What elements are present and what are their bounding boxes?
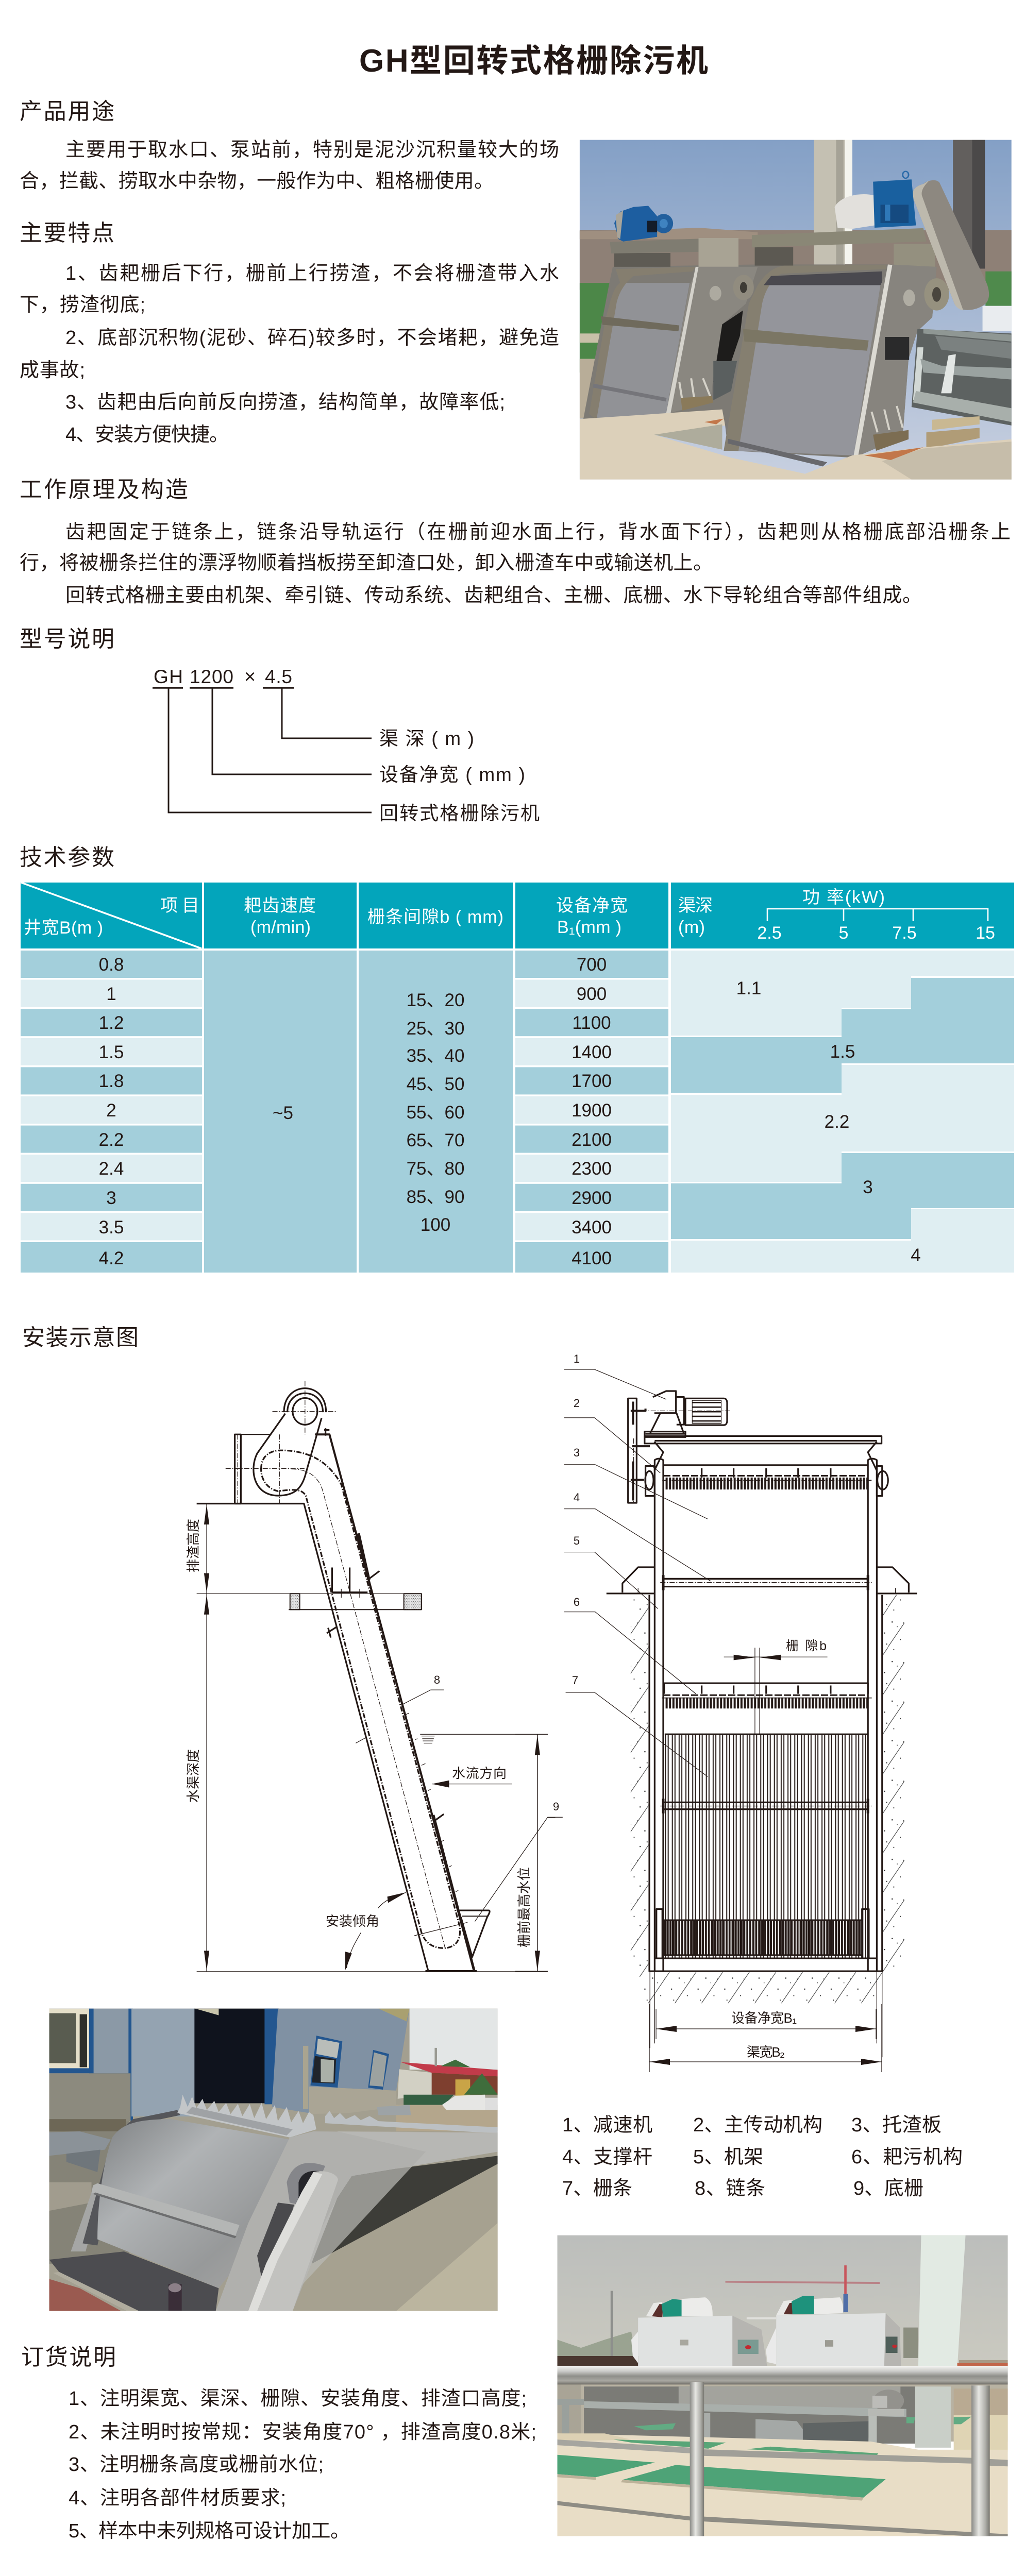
column: power by channel depth (stepped) [671, 951, 1014, 1273]
text block: ordering notes: 2、未注明时按常规：安装角度70° ，排渣高度0.8米; [69, 2421, 536, 2443]
text block: working principle: 齿耙固定于链条上，链条沿导轨运行（在栅前迎水面上行，背水面下行），齿耙则从格栅底部沿栅条上 [65, 521, 1011, 543]
column: power by channel depth (stepped): 4 [911, 1245, 921, 1265]
column: net width: 900 [577, 984, 607, 1004]
front-view installation drawing: 6 [574, 1596, 580, 1608]
photo: two installed screens behind stainless railing [557, 2235, 1008, 2538]
column: net width: 2100 [572, 1130, 612, 1150]
text block: ordering notes [69, 2388, 536, 2542]
heading: working principle: 工作原理及构造 [20, 477, 188, 502]
table header: 项 目 [160, 896, 199, 916]
side-view installation drawing: 排渣高度 [186, 1519, 201, 1572]
table header: 设备净宽 [556, 896, 628, 916]
text block: working principle: 回转式格栅主要由机架、牵引链、传动系统、齿耙组合、主栅、底栅、水下导轮组合等部件组成。 [65, 585, 922, 606]
text block: main features: 下，捞渣彻底; [20, 294, 145, 316]
text block: working principle [20, 521, 1011, 606]
text block: ordering notes: 5、样本中未列规格可设计加工。 [69, 2520, 350, 2542]
heading: product use: 产品用途 [20, 99, 114, 124]
parts legend: 5、机架 [693, 2146, 763, 2168]
column: well width: 4.2 [99, 1248, 124, 1268]
parts legend: 1、减速机 [562, 2114, 652, 2136]
column: bar gap [359, 951, 513, 1273]
column: well width: 3 [106, 1188, 116, 1208]
title: GH型回转式格栅除污机 [359, 43, 708, 79]
column: well width: 3.5 [99, 1217, 124, 1238]
table header: 7.5 [892, 923, 917, 943]
parts legend: 7、栅条 [562, 2178, 632, 2199]
column: net width: 700 [577, 955, 607, 975]
front-view installation drawing [515, 1352, 917, 2072]
column: net width: 4100 [572, 1248, 612, 1268]
front-view installation drawing: 2 [574, 1397, 580, 1410]
column: rake speed [204, 951, 357, 1273]
column: bar gap: 25、30 [407, 1019, 464, 1039]
parts legend: 3、托渣板 [851, 2114, 942, 2136]
table header: 2.5 [757, 923, 782, 943]
side-view installation drawing: 9 [553, 1800, 559, 1813]
table header: (m) [678, 918, 705, 937]
parts legend: 9、底栅 [853, 2178, 923, 2199]
column: power by channel depth (stepped): 1.1 [736, 978, 761, 998]
table header: 井宽B(m ) [24, 918, 103, 938]
text block: working principle: 行，将被栅条拦住的漂浮物顺着挡板捞至卸渣口处，卸入栅渣车中或输送机上。 [20, 552, 713, 574]
parts legend: 4、支撑杆 [562, 2146, 652, 2168]
photo: grab screen lying on factory yard [49, 2009, 498, 2311]
table header: B₁(mm ) [557, 918, 621, 937]
front-view installation drawing: 5 [574, 1534, 580, 1547]
front-view installation drawing: 3 [574, 1446, 580, 1459]
parts legend [562, 2114, 963, 2199]
column: bar gap: 100 [421, 1215, 450, 1235]
column: power by channel depth (stepped): 3 [863, 1177, 873, 1197]
model designation diagram: 1200 [190, 666, 233, 687]
parameter table [21, 883, 1014, 1273]
text block: main features: 2、底部沉积物(泥砂、碎石)较多时，不会堵耙，避免造 [65, 327, 559, 349]
column: well width: 1.5 [99, 1042, 124, 1062]
parts legend: 8、链条 [695, 2178, 765, 2199]
side-view installation drawing: 水流方向 [452, 1766, 507, 1781]
side-view installation drawing: 8 [434, 1673, 440, 1686]
text block: product use: 合，拦截、捞取水中杂物，一般作为中、粗格栅使用。 [20, 171, 494, 192]
table header: 15 [976, 923, 995, 943]
column: well width [21, 951, 202, 1273]
column: power by channel depth (stepped): 1.5 [830, 1042, 855, 1062]
column: power by channel depth (stepped): 2.2 [825, 1112, 849, 1132]
text block: ordering notes: 3、注明栅条高度或栅前水位; [69, 2454, 324, 2476]
text block: product use: 主要用于取水口、泵站前，特别是泥沙沉积量较大的场 [65, 139, 559, 161]
column: bar gap: 35、40 [407, 1046, 464, 1066]
column: net width: 2900 [572, 1188, 612, 1208]
table header [21, 883, 1014, 948]
model designation diagram: 设备净宽 ( mm ) [379, 764, 525, 785]
column: net width: 1100 [572, 1013, 611, 1033]
column: well width: 2.2 [99, 1130, 124, 1150]
column: well width: 2 [106, 1100, 116, 1121]
front-view installation drawing: 渠宽B₂ [747, 2044, 785, 2060]
column: well width: 0.8 [99, 955, 124, 975]
text block: product use [20, 139, 559, 192]
column: bar gap: 55、60 [407, 1103, 464, 1123]
front-view installation drawing: 1 [574, 1352, 580, 1365]
text block: main features [20, 263, 559, 446]
table header: 功 率(kW) [802, 888, 885, 907]
table header: (m/min) [250, 918, 311, 937]
text block: main features: 1、齿耙栅后下行，栅前上行捞渣，不会将栅渣带入水 [65, 263, 559, 284]
column: net width: 2300 [572, 1159, 612, 1179]
text block: main features: 4、安装方便快捷。 [65, 424, 229, 446]
heading: installation diagram: 安装示意图 [22, 1325, 139, 1350]
column: bar gap: 65、70 [407, 1130, 464, 1150]
column: net width: 1900 [572, 1100, 612, 1121]
model designation diagram: 4.5 [265, 666, 292, 687]
model designation diagram: GH [154, 666, 183, 687]
side-view installation drawing: 栅前最高水位 [516, 1867, 532, 1947]
column: net width: 1400 [572, 1042, 612, 1062]
table header: 5 [839, 923, 848, 943]
model designation diagram: 回转式格栅除污机 [379, 803, 540, 824]
column: well width: 1 [106, 984, 116, 1004]
text block: ordering notes: 1、注明渠宽、渠深、栅隙、安装角度、排渣口高度; [69, 2388, 527, 2410]
front-view installation drawing: 设备净宽B₁ [731, 2010, 797, 2026]
heading: technical parameters: 技术参数 [20, 845, 114, 870]
column: well width: 1.8 [99, 1071, 124, 1091]
parts legend: 2、主传动机构 [693, 2114, 822, 2136]
front-view installation drawing: 4 [574, 1491, 580, 1504]
column: bar gap: 15、20 [407, 990, 464, 1010]
side-view installation drawing [186, 1381, 563, 1972]
column: bar gap: 45、50 [407, 1074, 464, 1094]
photo: two grab screens on concrete channel [580, 140, 1012, 480]
table header: 栅条间隙b ( mm) [367, 907, 503, 927]
parts legend: 6、耙污机构 [851, 2146, 963, 2168]
table header: 渠深 [678, 896, 713, 916]
column: bar gap: 85、90 [407, 1187, 464, 1207]
text block: main features: 成事故; [20, 360, 85, 381]
side-view installation drawing: 安装倾角 [326, 1913, 379, 1929]
model designation diagram [153, 666, 540, 824]
column: bar gap: 75、80 [407, 1159, 464, 1179]
table header: 耙齿速度 [244, 896, 316, 916]
column: net width: 3400 [572, 1217, 612, 1238]
column: rake speed: ~5 [273, 1103, 293, 1123]
text block: main features: 3、齿耙由后向前反向捞渣，结构简单，故障率低; [65, 392, 505, 413]
heading: main features: 主要特点 [20, 221, 114, 246]
front-view installation drawing: 栅 隙b [786, 1639, 827, 1653]
column: net width: 1700 [572, 1071, 612, 1091]
heading: model description: 型号说明 [20, 626, 114, 652]
side-view installation drawing: 水渠深度 [186, 1749, 201, 1803]
model designation diagram: 渠 深 ( m ) [379, 728, 474, 749]
column: well width: 1.2 [99, 1013, 124, 1033]
heading: ordering notes: 订货说明 [21, 2345, 116, 2370]
front-view installation drawing: 7 [572, 1674, 578, 1687]
column: net width [515, 951, 668, 1273]
column: well width: 2.4 [99, 1159, 124, 1179]
text block: ordering notes: 4、注明各部件材质要求; [69, 2487, 286, 2509]
model designation diagram: × [244, 666, 256, 688]
